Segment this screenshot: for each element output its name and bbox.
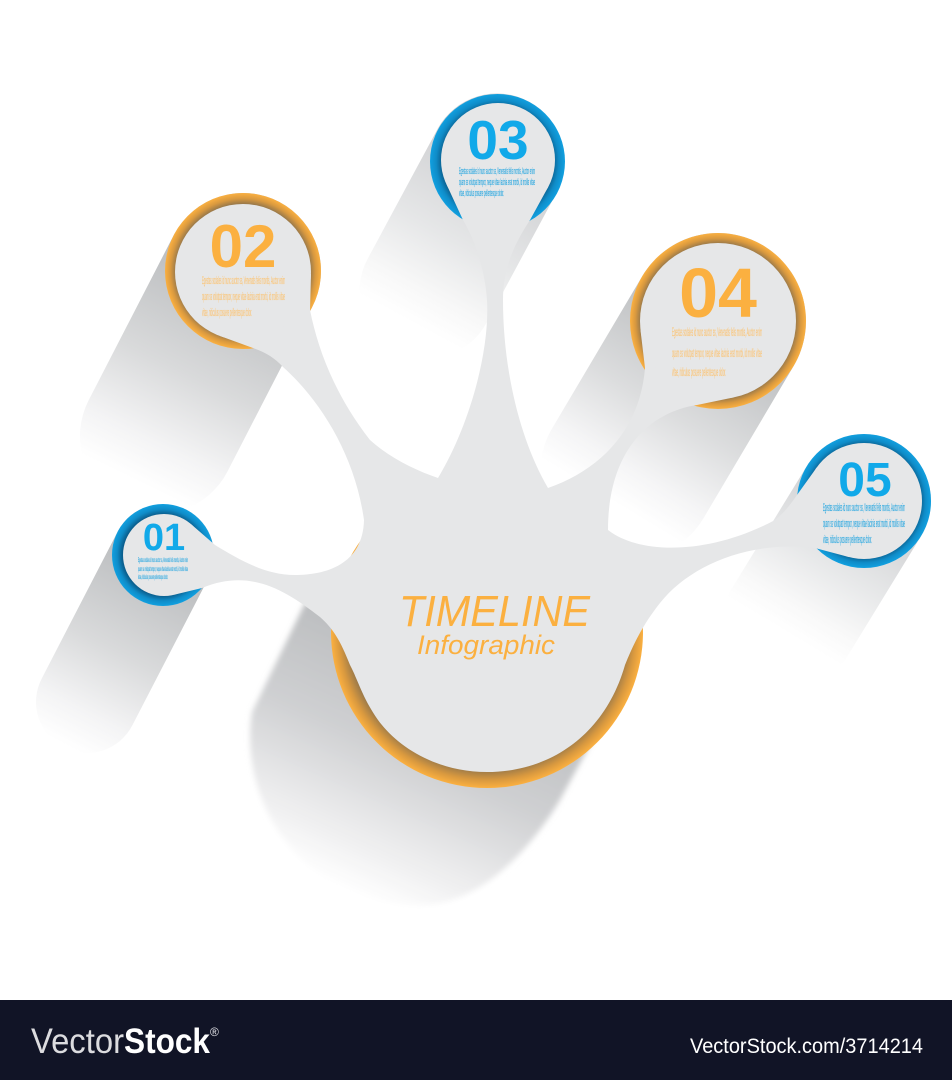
text: vitae, ridiculus posuere pellentesque dolor.: [202, 307, 252, 319]
footer bar: Vector: [31, 1022, 124, 1061]
bubble 03 content: 03: [467, 109, 529, 171]
footer bar: ®: [210, 1025, 219, 1039]
ring: bubble 02: [165, 193, 321, 349]
bubble 02 content: 02: [210, 213, 276, 280]
bubble 04 content: [672, 254, 762, 379]
bubble 05 content: 05: [838, 454, 892, 507]
text: quam ss volutpat tempor, neque vitae lacinia erat morbi, id mollis vitae: [459, 177, 535, 187]
ring: bubble 04: [630, 233, 806, 409]
bubble 04 content: 04: [679, 254, 757, 332]
text: vitae, ridiculus posuere pellentesque dolor.: [138, 574, 168, 581]
bubble 02 content: [202, 213, 285, 319]
bubble 03 content: [459, 109, 535, 198]
ring: bubble 05: [797, 434, 931, 568]
central title: Infographic: [417, 630, 556, 660]
text: vitae, ridiculus posuere pellentesque dolor.: [459, 188, 504, 198]
text: Egestas sodales id nunc auctor ss, Venenatis felis montis, Auctor enim: [138, 557, 188, 564]
footer bar: VectorStock.com/3714214: [690, 1035, 923, 1058]
footer bar: [0, 1000, 952, 1080]
central title: TIMELINE: [399, 587, 591, 636]
footer bar: Stock: [124, 1022, 210, 1061]
text: Egestas sodales id nunc auctor ss, Venenatis felis montis, Auctor enim: [459, 166, 535, 176]
bubble 05 content: [823, 454, 905, 546]
central title: [399, 587, 591, 660]
text: quam ss volutpat tempor, neque vitae lacinia erat morbi, id mollis vitae: [138, 566, 188, 573]
ring: bubble 03: [430, 94, 565, 229]
bubble 01 content: [138, 517, 188, 581]
text: vitae, ridiculus posuere pellentesque dolor.: [672, 365, 726, 379]
centre orange ring: [331, 476, 643, 788]
long shadows: [87, 161, 864, 905]
text: Egestas sodales id nunc auctor ss, Venenatis felis montis, Auctor enim: [202, 275, 285, 287]
ring: bubble 01: [112, 504, 214, 606]
grey hand-shaped blob with arms and bubbles: [123, 103, 922, 772]
text: quam ss volutpat tempor, neque vitae lacinia erat morbi, id mollis vitae: [202, 291, 285, 303]
bubble 01 content: 01: [143, 517, 185, 559]
